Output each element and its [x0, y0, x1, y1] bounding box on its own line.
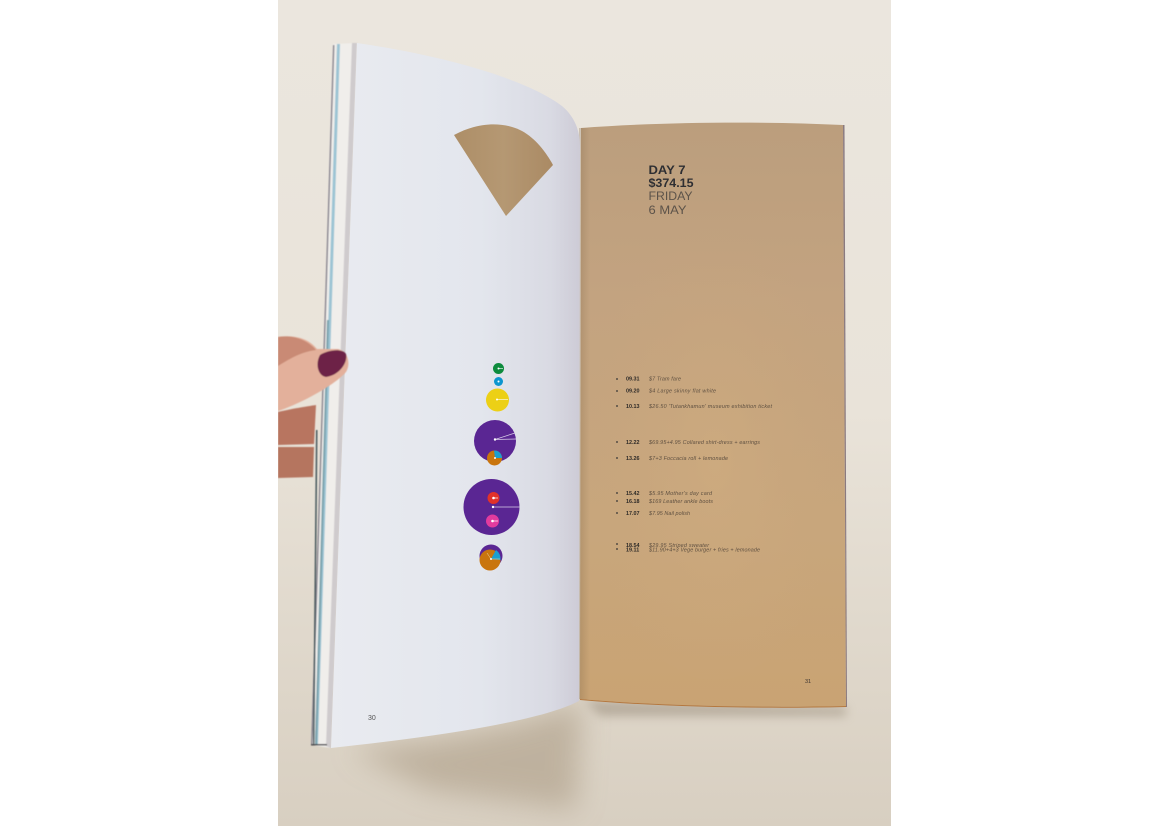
- heading: day 7: DAY 7: [648, 165, 686, 177]
- expense list: 13.26: [626, 456, 640, 462]
- page edges of booklet: [311, 43, 357, 748]
- expense list: 09.31: [626, 376, 640, 382]
- heading: day 7: FRIDAY: [648, 191, 693, 203]
- heading: day 7: $374.15: [648, 178, 694, 190]
- expense list: 09.20: [626, 388, 640, 394]
- shadow under booklet: [350, 700, 846, 810]
- heading: day 7: [648, 165, 694, 217]
- shadow in the gutter: [579, 128, 590, 700]
- expense list: $26.50 'Tutankhamun' museum exhibition ticket: [648, 404, 772, 410]
- circle: sweater with dinner pie: [480, 544, 502, 570]
- expense list: 15.42: [626, 491, 640, 497]
- circle: boots with card and polish: [464, 479, 520, 535]
- expense list: $4 Large skinny flat white: [648, 388, 716, 394]
- expense list: 12.22: [626, 440, 640, 446]
- page number 30: 30: [368, 715, 376, 722]
- expense list: $29.95 Striped sweater: [648, 543, 709, 549]
- hand holding the booklet: [278, 336, 348, 478]
- expense list: 10.13: [626, 404, 640, 410]
- page number 31: 31: [805, 679, 811, 685]
- expense list: 19.11: [626, 548, 639, 554]
- circle: shirt-dress with lunch pie: [474, 420, 516, 466]
- background wall: [278, 0, 891, 826]
- expense list: $5.95 Mother's day card: [648, 491, 713, 497]
- heading: day 7: 6 MAY: [648, 205, 687, 217]
- left page: white curled: [331, 43, 580, 748]
- expense list: [616, 376, 772, 554]
- expense list: 18.54: [626, 543, 640, 549]
- circle chart: spending through the day: [464, 363, 520, 570]
- expense list: $169 Leather ankle boots: [648, 499, 713, 505]
- expense list: 16.18: [626, 499, 640, 505]
- circle: tram fare: [493, 363, 504, 374]
- expense list: $7+3 Foccacia roll + lemonade: [648, 456, 728, 462]
- fingernail: [318, 350, 346, 377]
- side panels: [0, 0, 278, 826]
- thumb: [278, 336, 348, 411]
- circle: flat white: [494, 377, 503, 386]
- expense list: $7.95 Nail polish: [648, 511, 690, 517]
- expense list: $11.90+4+3 Vege burger + fries + lemonade: [648, 548, 760, 554]
- expense list: $7 Tram fare: [648, 376, 681, 382]
- circle: museum ticket: [486, 388, 509, 412]
- die-cut sector revealing tan page: [454, 124, 553, 216]
- expense list: $69.95+4.95 Collared shirt-dress + earrings: [648, 440, 760, 446]
- expense list: 17.07: [626, 511, 640, 517]
- right page: tan: [580, 123, 847, 708]
- lower fingers: [278, 405, 316, 445]
